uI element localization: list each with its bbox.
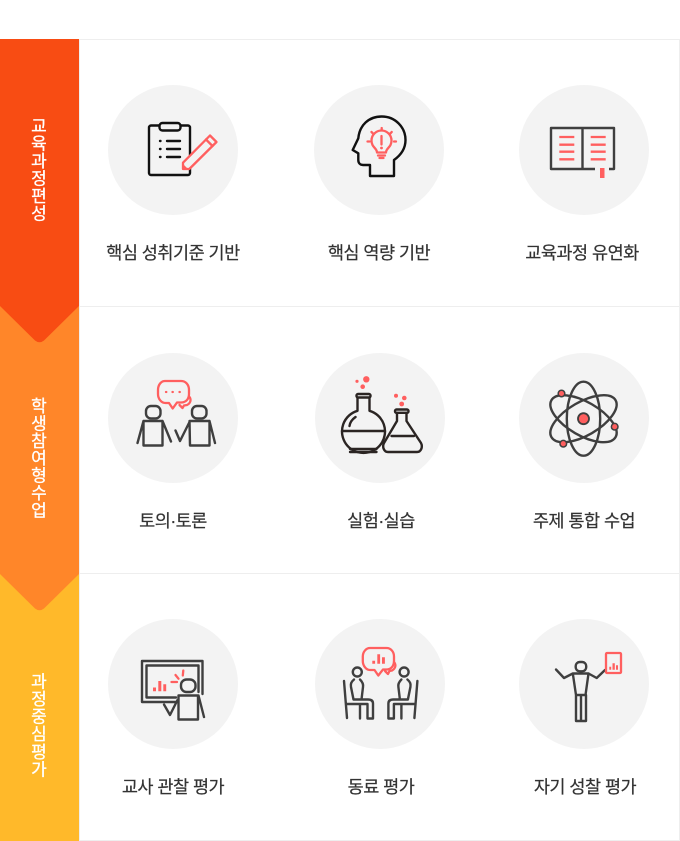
item: 주제 통합 수업 xyxy=(519,353,649,531)
band: 교육과정편성: 육 xyxy=(31,134,47,154)
item: 교사 관찰 평가 xyxy=(108,619,238,797)
icon: open book xyxy=(551,128,614,178)
icon: head with light bulb xyxy=(353,116,406,176)
item: 교육과정 유연화 xyxy=(519,85,649,263)
band: 학생참여형수업: 여 xyxy=(31,449,47,468)
label: 교사 관찰 평가 xyxy=(122,777,225,797)
item: 핵심 역량 기반 xyxy=(314,85,444,263)
band: 교육과정편성 xyxy=(0,39,79,342)
band: 과정중심평가: 과 xyxy=(31,672,47,692)
band: 학생참여형수업: 참 xyxy=(31,432,47,451)
label: 동료 평가 xyxy=(348,777,415,797)
band: 학생참여형수업: 생 xyxy=(31,414,47,433)
panel: left sidebar xyxy=(0,39,79,841)
icon: teacher at board xyxy=(142,661,204,720)
band: 교육과정편성: 교 xyxy=(31,117,47,136)
band: 과정중심평가: 중 xyxy=(31,708,47,727)
item: 동료 평가 xyxy=(315,619,445,797)
band: 학생참여형수업: 형 xyxy=(31,467,47,486)
item: 핵심 성취기준 기반 xyxy=(106,85,240,263)
band: 교육과정편성: 정 xyxy=(31,170,47,188)
band: 과정중심평가: 정 xyxy=(31,690,47,709)
band: 과정중심평가: 심 xyxy=(31,725,47,744)
band: 학생참여형수업: 학 xyxy=(31,397,47,416)
label: 핵심 성취기준 기반 xyxy=(106,243,240,263)
label: 주제 통합 수업 xyxy=(533,511,635,531)
icon: two seated peers xyxy=(344,648,417,718)
label: 핵심 역량 기반 xyxy=(328,243,431,263)
item: 자기 성찰 평가 xyxy=(519,619,649,797)
band: 학생참여형수업: 수 xyxy=(31,484,47,503)
icon: atom xyxy=(543,382,624,456)
icon: clipboard and pencil xyxy=(149,123,216,175)
icon: person with tablet xyxy=(556,653,621,721)
label: 실험·실습 xyxy=(347,511,415,531)
icon: two people talking xyxy=(138,381,215,446)
item: 토의·토론 xyxy=(108,353,238,531)
band: 과정중심평가: 평 xyxy=(31,743,47,762)
band: 학생참여형수업 xyxy=(0,290,79,610)
label: 자기 성찰 평가 xyxy=(534,777,637,797)
band: 학생참여형수업: 업 xyxy=(31,501,47,520)
band: 교육과정편성: 성 xyxy=(31,204,47,224)
band: 과정중심평가 xyxy=(0,560,79,841)
label: 교육과정 유연화 xyxy=(525,243,639,263)
icon: flasks xyxy=(342,376,422,453)
band: 교육과정편성: 과 xyxy=(31,152,47,171)
item: 실험·실습 xyxy=(315,353,445,531)
band: 교육과정편성: 편 xyxy=(31,187,47,206)
label: 토의·토론 xyxy=(139,511,207,531)
band: 과정중심평가: 가 xyxy=(31,760,47,779)
